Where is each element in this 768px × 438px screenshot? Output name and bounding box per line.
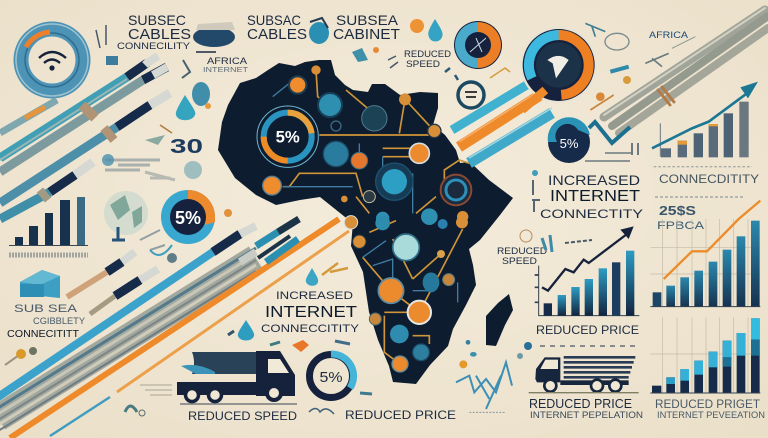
orange and blue cables to the gauge <box>452 83 552 163</box>
stat: 30: 30 <box>170 136 203 158</box>
label: increased internet connectivity centre: INCREASED <box>276 290 353 302</box>
icon: drop lower left <box>238 320 254 340</box>
label: reduced speed small: REDUCED <box>497 246 547 257</box>
icon: delivery truck left <box>140 351 297 404</box>
title: subsec cables: CABLES <box>128 26 191 43</box>
label: increased internet connectity: INCREASED <box>548 172 640 188</box>
icon: large magnifier gauge <box>520 27 597 110</box>
label: reduced speed small: SPEED <box>502 256 537 267</box>
label: reduced speed: REDUCED <box>404 49 451 60</box>
label: africa internet: AFRICA <box>207 56 248 67</box>
map network south <box>344 216 468 372</box>
doodles near chart <box>517 235 640 359</box>
map node: central 5% donut <box>257 106 318 167</box>
icon: segmented gauge <box>454 21 502 69</box>
donut: 5% bottom <box>310 354 354 398</box>
title: subsea cabinet: CABINET <box>333 26 400 43</box>
title: subsec cables <box>117 12 191 52</box>
title: subsec cables: SUBSEC <box>128 12 186 28</box>
label: reduced speed <box>404 49 451 70</box>
bar chart: reduced price <box>535 226 639 316</box>
map node: central 5% donut: 5% <box>276 128 300 147</box>
label: sub sea connectivity <box>7 303 85 340</box>
title: subsec cables: CONNECILITY <box>117 41 191 52</box>
doodles and globe <box>102 125 232 235</box>
doodles near increased <box>520 170 540 242</box>
icon: delivery truck right <box>529 357 639 393</box>
label: africa internet <box>203 56 249 74</box>
left bar chart <box>9 197 88 255</box>
label: sub sea connectivity: CGIBBLETY <box>33 316 85 326</box>
bar chart: top right <box>652 82 758 167</box>
title: subsac cables: CABLES <box>247 26 307 43</box>
large diagonal cable bundle <box>0 219 349 438</box>
title: subsac cables: SUBSAC <box>247 12 301 28</box>
icon: cable box <box>20 270 60 298</box>
icon: blue cable coil <box>309 18 329 44</box>
upper-left patch cables <box>0 56 170 219</box>
map: madagascar <box>486 294 513 346</box>
label: reduced price: REDUCED PRICE <box>536 323 639 337</box>
icon: small ring <box>458 82 484 108</box>
title: subsac cables <box>247 12 307 43</box>
label: reduced speed: SPEED <box>406 59 440 70</box>
label: connectivity and stat <box>655 174 759 232</box>
label: africa internet: INTERNET <box>203 67 249 74</box>
icon: water drop <box>176 95 195 120</box>
label: reduced priget internet peveeation <box>655 397 765 420</box>
donut: 5% bottom: 5% <box>320 369 342 386</box>
doodles near connectors <box>112 227 177 263</box>
map network north <box>257 65 471 225</box>
label: sub sea connectivity: SUB SEA <box>14 303 78 315</box>
label: reduced price internet population: INTERNET PEPELATION <box>530 410 643 421</box>
chart: stacked cyan bars <box>650 317 760 393</box>
label: increased internet connectivity centre <box>261 290 360 335</box>
label: reduced price internet population: REDUCED PRICE <box>529 397 632 411</box>
title: subsea cabinet <box>333 12 400 43</box>
small bottom doodles <box>125 331 372 416</box>
donut: 5% upper left: 5% <box>175 208 201 228</box>
small doodles, upper middle <box>96 25 510 109</box>
label: increased internet connectity: CONNECTITY <box>540 207 643 221</box>
icon: broken network doodle <box>456 340 512 412</box>
short connectors <box>67 252 158 314</box>
label: reduced speed bottom: REDUCED SPEED <box>188 409 297 423</box>
grey subsea cables <box>604 8 768 133</box>
label: sub sea connectivity: CONNECITITT <box>7 329 79 340</box>
label: reduced speed small <box>497 246 547 267</box>
icon: small gears <box>5 347 37 365</box>
label: increased internet connectivity centre: CONNECCITITY <box>261 323 360 335</box>
label: africa: AFRICA <box>649 30 689 41</box>
label: increased internet connectivity centre: INTERNET <box>265 304 357 321</box>
label: reduced price internet population <box>529 397 643 421</box>
donut: 5% upper left <box>161 190 215 244</box>
label: increased internet connectity <box>540 172 643 221</box>
label: connectivity and stat: CONNECDITITY <box>659 174 759 186</box>
label: increased internet connectity: INTERNET <box>550 188 640 205</box>
map: africa <box>218 60 513 384</box>
label: reduced priget internet peveeation: INTERNET PEVEEATION <box>657 410 765 420</box>
badge: 5% with zigzag <box>548 117 638 163</box>
label: connectivity and stat: FPBCA <box>657 220 705 232</box>
chart: blue bars with orange line <box>650 201 760 307</box>
label: reduced priget internet peveeation: REDUCED PRIGET <box>655 397 761 411</box>
icons: drops and badges near centre label <box>270 263 350 352</box>
icon: wifi cable ring <box>16 24 88 96</box>
label: reduced price bottom: REDUCED PRICE <box>345 408 456 422</box>
badge: 5% with zigzag: 5% <box>560 136 579 151</box>
icon: cable spool <box>193 22 235 52</box>
title: subsea cabinet: SUBSEA <box>336 12 399 28</box>
icons: orange badge and water drop <box>410 19 443 42</box>
label: connectivity and stat: 25$S <box>659 203 696 218</box>
doodles upper right <box>585 23 695 110</box>
